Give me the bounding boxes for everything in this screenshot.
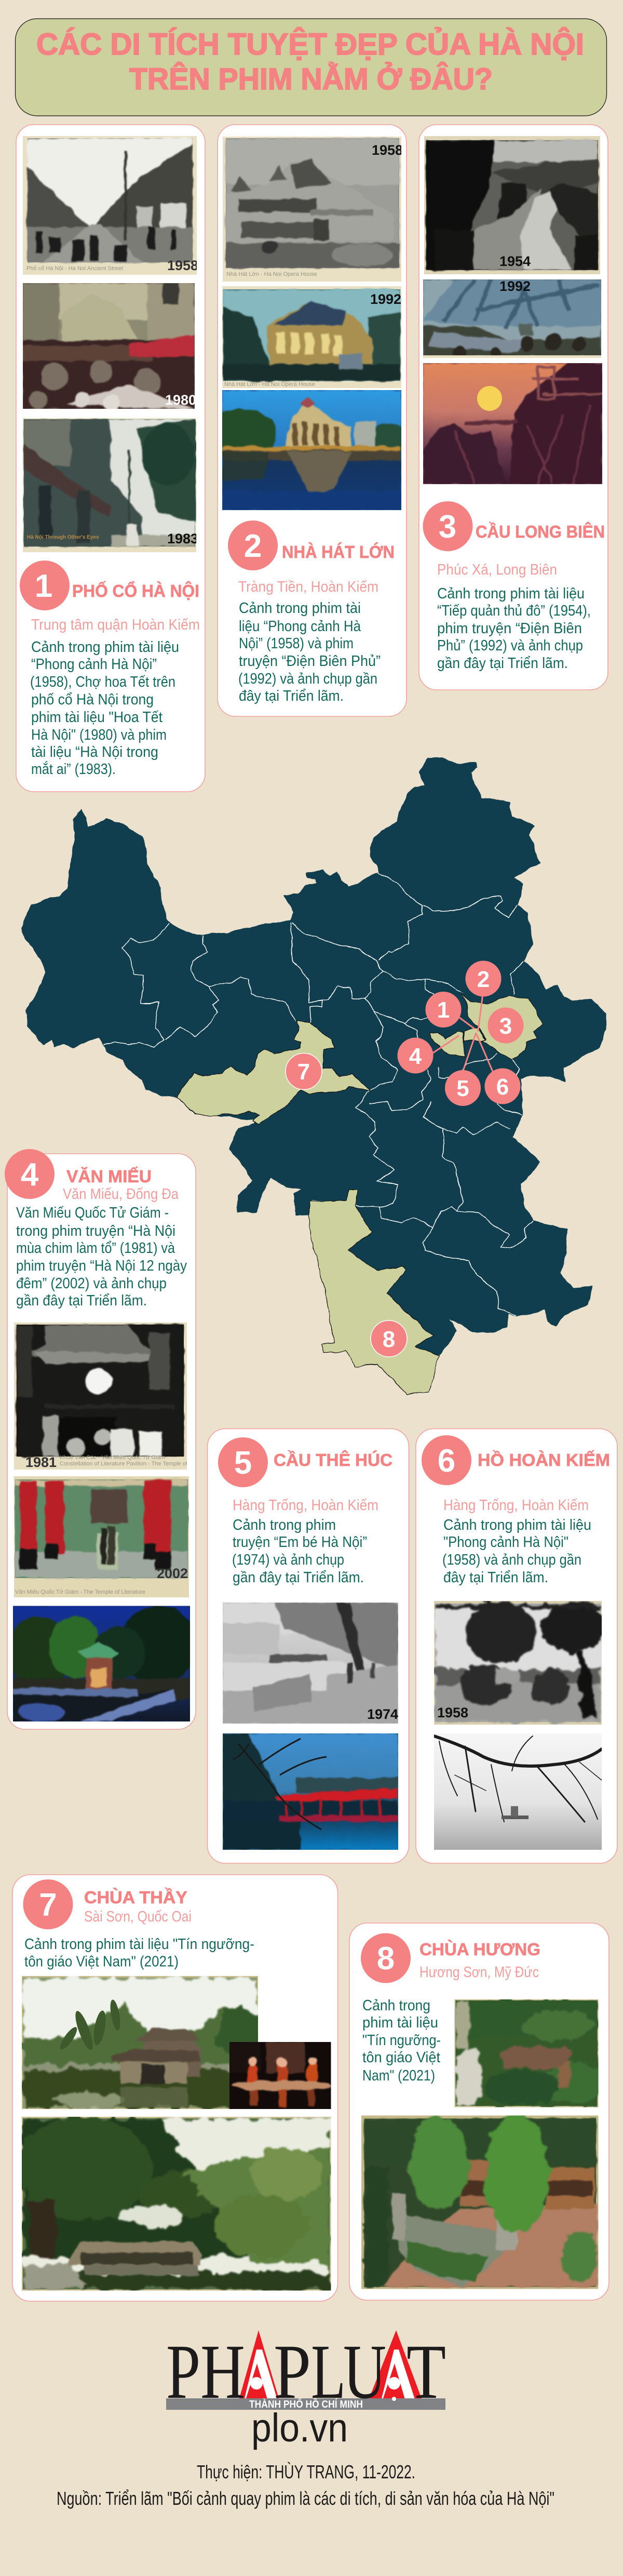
map marker 6: 6 — [496, 1074, 509, 1100]
photo: flower market 1980: 1980 — [165, 392, 196, 408]
description — [24, 1936, 254, 1970]
heading: Nhà hát lớn: NHÀ HÁT LỚN — [282, 542, 395, 562]
description — [16, 1205, 187, 1309]
description: phim truyện “Điện Biên — [437, 620, 582, 637]
map marker 4: 4 — [409, 1044, 422, 1069]
location: Hàng Trống, Hoàn Kiếm — [443, 1497, 589, 1514]
photo: opera house 1992: 1992 — [370, 291, 401, 307]
description: (1974) và ảnh chụp — [232, 1552, 344, 1568]
description: đây tại Triển lãm. — [443, 1569, 548, 1586]
district 4: Đống Đa — [430, 1032, 465, 1057]
photo: Hoàn Kiếm lake in mist — [434, 1733, 602, 1850]
description: (1958) và ảnh chụp gần — [442, 1552, 581, 1568]
map marker 2: 2 — [477, 967, 490, 992]
logo: Pháp Luật TP.HCM: U — [343, 2329, 386, 2415]
heading: Phố cổ Hà Nội: PHỐ CỔ HÀ NỘI — [72, 581, 199, 600]
description: Cảnh trong phim tài liệu — [437, 585, 585, 602]
map marker 5: 5 — [456, 1076, 469, 1101]
location: Hương Sơn, Mỹ Đức — [419, 1964, 539, 1981]
photo: bridge 1954 — [424, 136, 600, 274]
badge 6 — [422, 1435, 471, 1485]
badge 7: 7 — [39, 1887, 57, 1923]
map marker 3 — [488, 1008, 523, 1043]
photo: Khuê Văn Các 1981: 1981 — [25, 1454, 57, 1470]
photo: Thê Húc bridge — [223, 1733, 398, 1850]
photo: opera house 1992: Nhà Hát Lớn - Ha Noi Opera House — [224, 381, 315, 388]
map marker 4 — [398, 1038, 433, 1073]
photo: bridge 1992: 1992 — [499, 278, 531, 294]
district 8: Mỹ Đức — [309, 1191, 439, 1394]
photo: old street 1983 — [23, 418, 198, 552]
photo: opera house 1958: 1958 — [372, 142, 403, 158]
heading: Cầu Thê Húc: CẦU THÊ HÚC — [274, 1450, 392, 1470]
description: Cảnh trong — [362, 1997, 430, 2014]
description: Cảnh trong phim tài liệu — [31, 639, 179, 656]
connector lines — [431, 994, 493, 1071]
photo: Văn Miếu at night — [13, 1606, 190, 1721]
photo: Thầy pagoda bridge and tree — [22, 2117, 331, 2291]
description: phim tài liệu — [362, 2014, 438, 2031]
badge 2: 2 — [244, 528, 262, 564]
description: tài liệu “Hà Nội trong — [31, 744, 158, 760]
map marker 3: 3 — [499, 1013, 512, 1039]
description: Nội” (1958) và phim — [239, 635, 354, 652]
location: Văn Miếu, Đống Đa — [63, 1186, 179, 1203]
description: "Phong cảnh Hà Nội" — [443, 1534, 568, 1551]
logo: Pháp Luật TP.HCM: T — [407, 2329, 446, 2415]
description — [442, 1517, 591, 1586]
panel 3: Cầu Long Biên — [419, 125, 608, 690]
photo: old street 1983: 1983 — [167, 531, 198, 546]
photo: Hoàn Kiếm lake 1958: 1958 — [437, 1705, 468, 1720]
photo: Hương pagoda courtyard — [361, 2115, 598, 2289]
credit line: Thực hiện: THÙY TRANG, 11-2022. — [197, 2461, 415, 2482]
badge 1 — [20, 560, 70, 610]
description — [30, 639, 179, 778]
location: Trung tâm quận Hoàn Kiếm — [31, 617, 200, 633]
photo: Temple of Literature 2002: 2002 — [157, 1566, 188, 1581]
photo: opera house at night — [222, 390, 401, 510]
photo: old quarter 1958: Phố cổ Hà Nội - Ha Noi Ancient Street — [26, 265, 123, 272]
description: “Tiếp quản thủ đô” (1954), — [437, 603, 591, 619]
photo: Khuê Văn Các 1981 — [14, 1323, 213, 1470]
photo: Thầy pagoda on the lake — [22, 1976, 258, 2109]
logo: Pháp Luật TP.HCM: PH — [166, 2329, 245, 2415]
district 7: Quốc Oai — [177, 1021, 372, 1124]
photo: bridge 1992 — [423, 278, 601, 358]
description: gần đây tại Triển lãm. — [233, 1569, 364, 1586]
description: truyện “Em bé Hà Nội” — [233, 1534, 367, 1551]
description: Văn Miếu Quốc Tử Giám - — [16, 1205, 169, 1221]
badge 8 — [361, 1933, 411, 1983]
photo: Hương pagoda from above — [455, 1999, 598, 2107]
dark map base — [22, 757, 606, 1357]
photo: Temple of Literature 2002 — [14, 1476, 189, 1597]
description: Cảnh trong phim tài — [239, 600, 361, 617]
description: phim truyện “Hà Nội 12 ngày — [16, 1258, 187, 1274]
badge 3: 3 — [439, 509, 456, 545]
badge 4 — [5, 1149, 55, 1199]
heading: Chùa Thầy: CHÙA THẦY — [84, 1888, 187, 1907]
photo: old street 1983: Hà Nội Through Other's Eyes — [27, 535, 99, 540]
description: Hà Nội" (1980) và phim — [31, 727, 167, 743]
description — [362, 1997, 441, 2084]
description — [232, 1517, 367, 1586]
photo: bridge 1954: 1954 — [499, 253, 531, 269]
heading: Văn Miếu: VĂN MIẾU — [66, 1167, 152, 1186]
description: đây tại Triển lãm. — [239, 688, 344, 704]
photo: opera house 1958 — [223, 137, 403, 282]
site address: plo.vn — [251, 2406, 348, 2450]
description: liệu “Phong cảnh Hà — [239, 618, 361, 635]
description: gần đây tại Triển lãm. — [437, 655, 568, 672]
photo: lake scene 1974 — [223, 1603, 398, 1724]
heading: Cầu Long Biên: CẦU LONG BIÊN — [476, 522, 605, 541]
description: gần đây tại Triển lãm. — [16, 1292, 147, 1309]
description: Cảnh trong phim tài liệu "Tín ngưỡng- — [24, 1936, 254, 1953]
map marker 8 — [371, 1320, 407, 1357]
title banner: CÁC DI TÍCH TUYỆT ĐẸP CỦA HÀ NỘI — [36, 28, 584, 61]
badge 4: 4 — [21, 1157, 39, 1193]
map marker 1 — [426, 992, 461, 1027]
photo: old quarter 1958 — [23, 136, 198, 275]
description: Nam" (2021) — [362, 2067, 435, 2084]
badge 7 — [23, 1879, 73, 1929]
description: tôn giáo Việt — [362, 2049, 440, 2066]
photo: opera house 1992 — [222, 286, 401, 388]
description: "Tín ngưỡng- — [362, 2032, 441, 2049]
description: “Phong cảnh Hà Nội” — [31, 656, 157, 673]
description: tôn giáo Việt Nam" (2021) — [24, 1953, 179, 1970]
map of Hanoi — [22, 757, 606, 1394]
description: truyện “Điện Biên Phủ” — [239, 653, 381, 670]
map marker 7 — [286, 1053, 322, 1090]
logo: Pháp Luật TP.HCM: L — [311, 2329, 346, 2415]
description: Phủ” (1992) và ảnh chụp — [437, 637, 583, 654]
photo: Hoàn Kiếm lake 1958 — [434, 1601, 602, 1725]
description: (1992) và ảnh chụp gần — [238, 671, 377, 687]
panel 7: Chùa Thầy — [12, 1875, 337, 2301]
location: Sài Sơn, Quốc Oai — [84, 1908, 192, 1925]
panel 2: Nhà hát lớn — [204, 125, 409, 716]
badge 8: 8 — [377, 1941, 395, 1977]
photo: Khuê Văn Các 1981: Constellation of Literature Pavilion - The Temple of Literature — [60, 1461, 213, 1467]
logo: Pháp Luật TP.HCM: P — [274, 2329, 311, 2415]
description: Cảnh trong phim tài liệu — [443, 1517, 591, 1533]
photo: water puppets — [229, 2042, 331, 2109]
photo: bridge at sunset — [423, 363, 602, 484]
description — [437, 585, 591, 672]
logo: Pháp Luật TP.HCM: THÀNH PHỐ HỒ CHÍ MINH — [249, 2398, 363, 2410]
badge 5: 5 — [234, 1445, 252, 1481]
description: mắt ai” (1983). — [31, 760, 116, 778]
map marker 5 — [445, 1070, 481, 1106]
heading: Hồ Hoàn Kiếm: HỒ HOÀN KIẾM — [478, 1450, 610, 1470]
map marker 7: 7 — [297, 1059, 310, 1085]
description: Cảnh trong phim — [233, 1517, 336, 1533]
photo: flower market 1980 — [23, 283, 196, 409]
title banner — [16, 19, 606, 116]
badge 1: 1 — [35, 568, 52, 604]
location: Hàng Trống, Hoàn Kiếm — [233, 1497, 378, 1514]
panel 1: Phố cổ Hà Nội — [16, 125, 205, 792]
description — [238, 600, 381, 704]
badge 2 — [228, 520, 278, 570]
description: phim tài liệu "Hoa Tết — [31, 709, 162, 726]
map marker 2 — [465, 961, 502, 996]
photo: Temple of Literature 2002: Văn Miếu Quốc Tử Giám - The Temple of Literature — [15, 1589, 145, 1595]
map marker 1: 1 — [437, 997, 450, 1023]
location: Phúc Xá, Long Biên — [437, 562, 557, 578]
badge 5 — [218, 1437, 268, 1487]
map marker 6 — [485, 1068, 520, 1104]
district: Hoàn Kiếm — [464, 1029, 485, 1040]
photo: Khuê Văn Các 1981: Khuê Văn Các - Văn Miếu Quốc Tử Giám — [60, 1454, 165, 1461]
title banner: TRÊN PHIM NẰM Ở ĐÂU? — [129, 62, 493, 96]
description: (1958), Chợ hoa Tết trên — [30, 674, 175, 690]
description: phố cổ Hà Nội trong — [31, 691, 154, 708]
badge 6: 6 — [438, 1443, 455, 1479]
map marker 8: 8 — [383, 1327, 395, 1352]
panel 6: Hồ Hoàn Kiếm — [416, 1429, 617, 1863]
panel 8: Chùa Hương — [349, 1923, 609, 2300]
badge 3 — [423, 501, 472, 551]
location: Tràng Tiền, Hoàn Kiếm — [238, 579, 378, 595]
district 3: Long Biên — [461, 992, 543, 1061]
photo: opera house 1958: Nhà Hát Lớn - Ha Noi Opera House — [226, 271, 317, 277]
panel 4: Văn Miếu — [5, 1149, 213, 1729]
description: trong phim truyện “Hà Nội — [16, 1223, 175, 1239]
photo: lake scene 1974: 1974 — [367, 1706, 398, 1722]
description: đêm” (2002) và ảnh chụp — [16, 1275, 167, 1292]
logo: Pháp Luật TP.HCM — [166, 2329, 446, 2415]
photo: old quarter 1958: 1958 — [167, 258, 198, 273]
description: mùa chim làm tổ” (1981) và — [16, 1240, 175, 1257]
panel 5: Cầu Thê Húc — [208, 1429, 409, 1863]
heading: Chùa Hương: CHÙA HƯƠNG — [419, 1940, 540, 1959]
